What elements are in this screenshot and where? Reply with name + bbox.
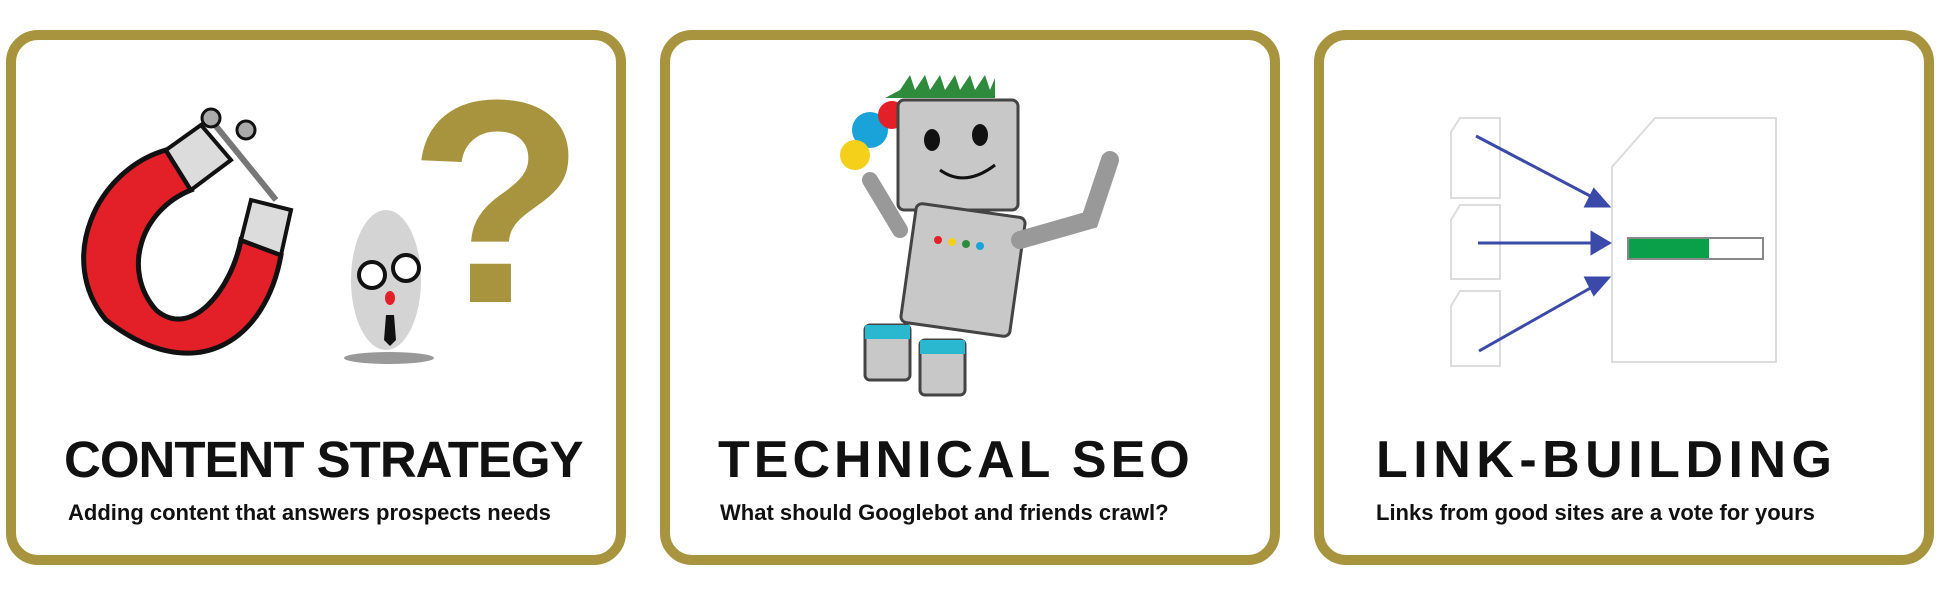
illustration: links diagram bbox=[1450, 117, 1777, 367]
text: subtitle: What should Googlebot and friends crawl? bbox=[720, 500, 1169, 525]
illustration: googlebot robot bbox=[840, 75, 1119, 396]
text: subtitle: Adding content that answers prospects needs bbox=[68, 500, 551, 525]
heading: LINK-BUILDING bbox=[1376, 431, 1837, 489]
arrows bbox=[1476, 136, 1609, 351]
panel: technical seo bbox=[660, 30, 1280, 565]
heading: CONTENT STRATEGY bbox=[64, 431, 583, 488]
icon: question mark: ? bbox=[408, 40, 585, 364]
progress bar bbox=[1628, 238, 1763, 259]
heading: TECHNICAL SEO bbox=[718, 431, 1194, 489]
icon: person bbox=[344, 210, 434, 364]
illustration: magnet, person, question mark bbox=[81, 40, 585, 364]
text: subtitle: Links from good sites are a vote for yours bbox=[1376, 500, 1815, 525]
panel: content strategy bbox=[6, 30, 626, 565]
panel: link-building bbox=[1314, 30, 1934, 565]
icon: magnet bbox=[84, 109, 291, 353]
